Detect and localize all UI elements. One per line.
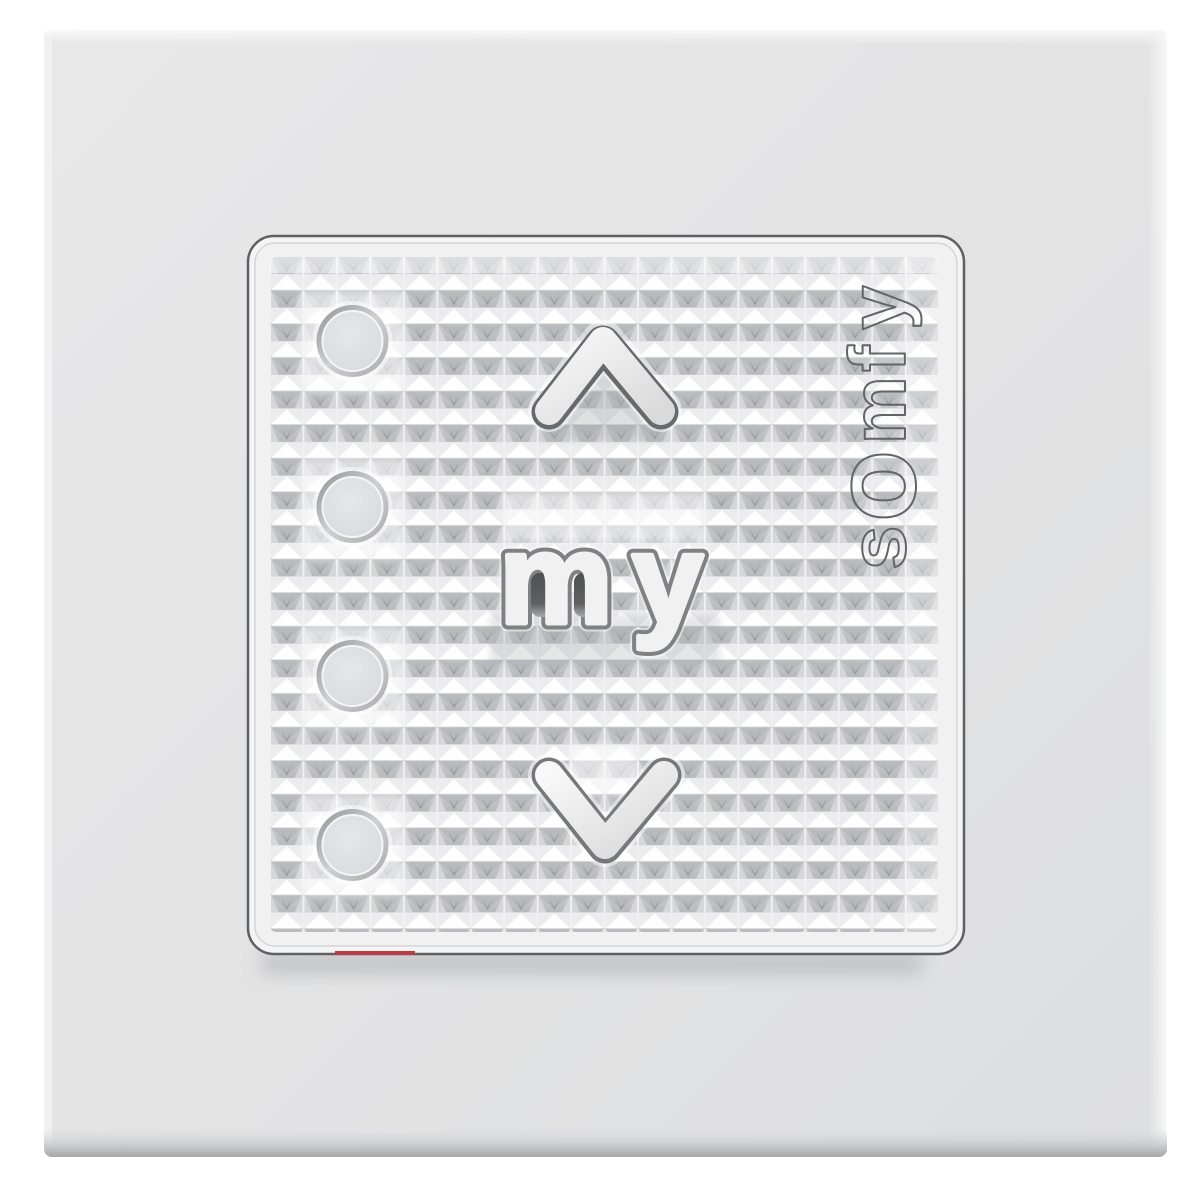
- LED button 4: [312, 805, 392, 885]
- my button: m: [499, 508, 613, 651]
- somfy logo: y: [833, 285, 922, 330]
- LED button 2: [312, 467, 392, 547]
- somfy logo: m: [837, 376, 922, 444]
- module housing: [248, 236, 964, 954]
- control module: [248, 236, 964, 955]
- my button: y: [632, 508, 703, 651]
- up arrow button: [549, 341, 661, 412]
- somfy logo: s: [833, 526, 922, 570]
- my button: y: [632, 508, 703, 651]
- somfy logo: o: [809, 450, 941, 522]
- my button: m: [499, 508, 613, 651]
- pyramid texture: [270, 257, 938, 932]
- my button: m: [499, 508, 613, 651]
- my button: [499, 508, 703, 651]
- down arrow button: [549, 775, 664, 846]
- red indicator strip: [335, 951, 415, 955]
- my button: y: [632, 508, 703, 651]
- LED button 1: [312, 301, 392, 381]
- module tray steps: [255, 243, 957, 946]
- somfy logo: f: [833, 345, 922, 372]
- somfy logo: [809, 285, 941, 570]
- LED button 3: [312, 636, 392, 716]
